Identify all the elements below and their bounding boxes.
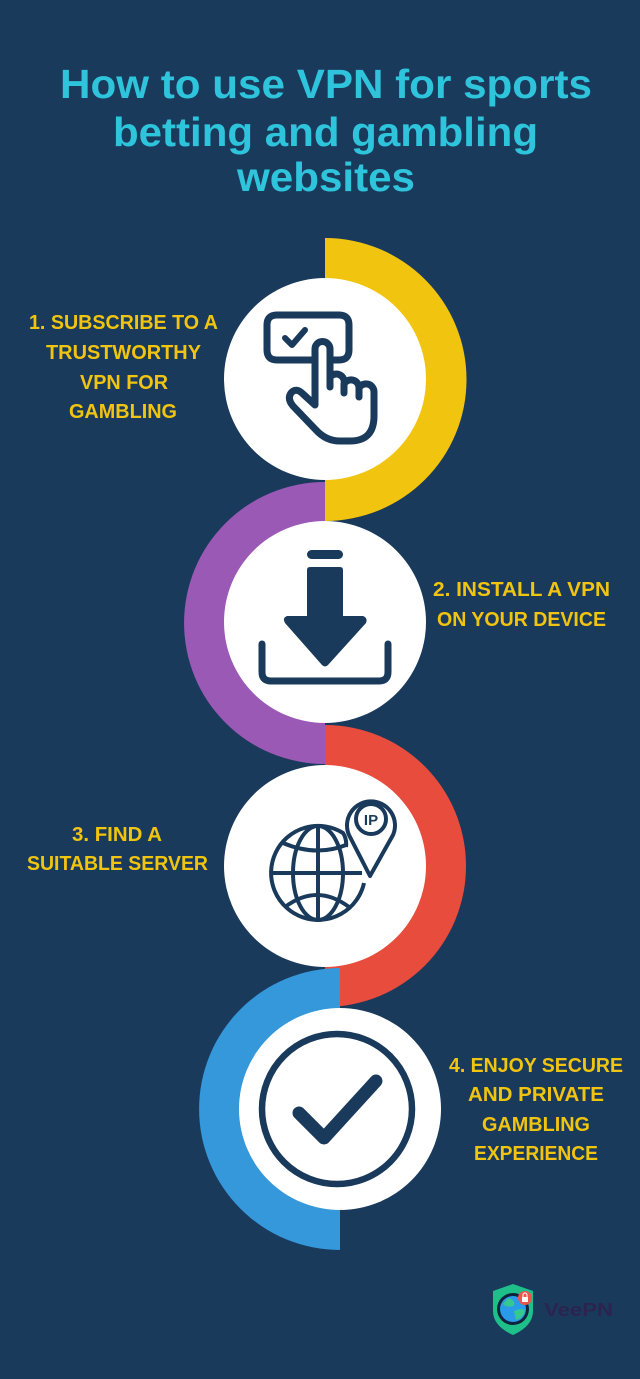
step 2 circle with download icon [224, 521, 426, 723]
title: websites [236, 154, 415, 200]
step 4 label [449, 1055, 623, 1165]
logo: VeePN shield [493, 1284, 613, 1335]
step 4 label: EXPERIENCE [474, 1143, 598, 1165]
step 1 label [29, 312, 218, 423]
logo: VeePN shield: VeePN [544, 1300, 613, 1320]
step 4 label: GAMBLING [482, 1114, 590, 1136]
step 1 label: VPN FOR [80, 372, 169, 394]
step 4 label: 4. ENJOY SECURE [449, 1055, 623, 1077]
step 1 label: 1. SUBSCRIBE TO A [29, 312, 218, 334]
step 3 label [27, 824, 209, 875]
step 3 label: SUITABLE SERVER [27, 853, 209, 875]
step 2 label: 2. INSTALL A VPN [433, 579, 610, 601]
half ring: purple [184, 482, 325, 764]
step 2 label: ON YOUR DEVICE [437, 609, 606, 631]
step 4 circle with check icon [239, 1008, 441, 1210]
title [60, 61, 592, 200]
half ring: blue [199, 968, 340, 1250]
half ring: red [325, 725, 466, 1007]
step 2 label [433, 579, 610, 631]
step 1 label: TRUSTWORTHY [46, 342, 202, 364]
step 1 circle with tap icon [224, 278, 426, 480]
step 1 label: GAMBLING [69, 401, 177, 423]
title: How to use VPN for sports [60, 61, 592, 107]
step 3 circle with globe and IP pin icon: IP [364, 812, 378, 829]
step 3 circle with globe and IP pin icon [224, 765, 426, 967]
step 4 label: AND PRIVATE [468, 1084, 604, 1106]
step 3 label: 3. FIND A [72, 824, 162, 846]
half ring: yellow [325, 238, 466, 521]
title: betting and gambling [113, 109, 538, 155]
